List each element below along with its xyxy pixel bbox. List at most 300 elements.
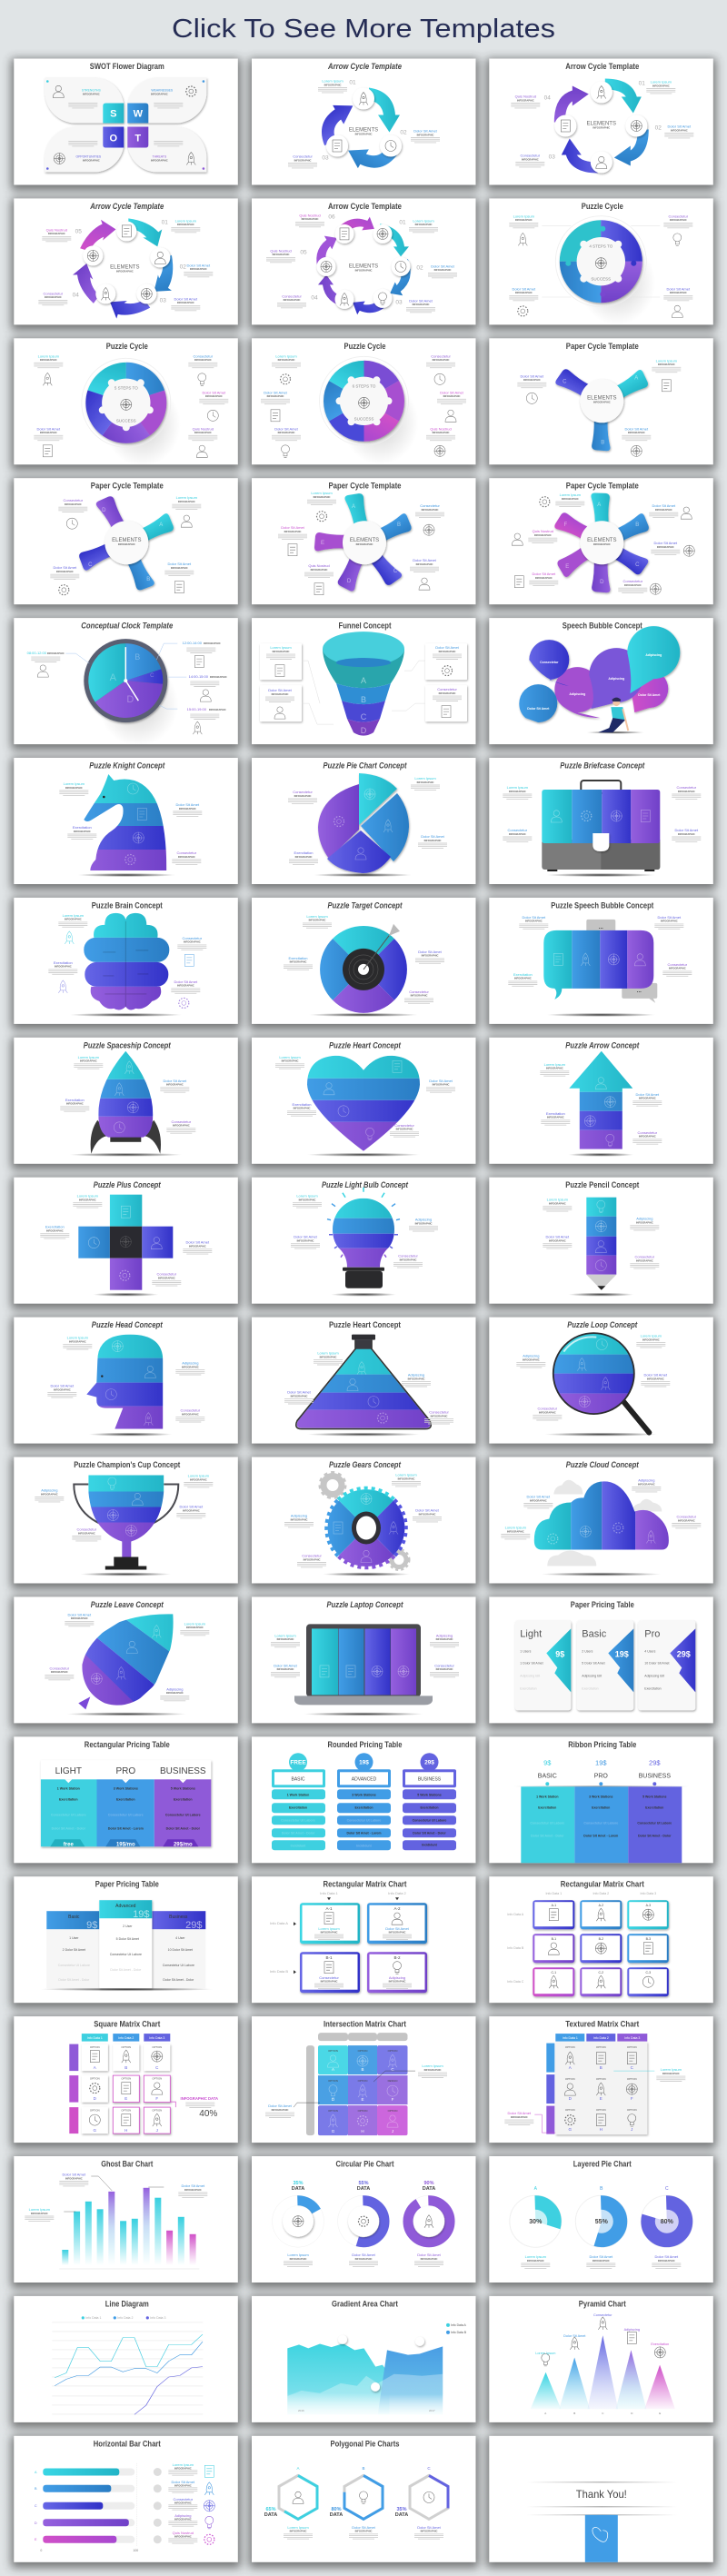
column text: PRO <box>115 1766 135 1776</box>
paper blades <box>77 494 175 592</box>
text blocks: Consectetur <box>64 498 84 502</box>
panel: Rounded Pricing Table <box>252 1736 476 1863</box>
cell content: C <box>391 2067 394 2072</box>
column text: BUSINESS <box>418 1776 442 1782</box>
SWOT text blocks: INFOGRAPHIC <box>151 158 168 162</box>
cell content <box>548 1904 653 1988</box>
text blocks <box>503 785 701 841</box>
panel: Ghost Bar Chart <box>14 2156 238 2283</box>
text blocks: Exercitation <box>73 825 92 830</box>
text blocks: INFOGRAPHIC <box>400 1258 416 1261</box>
heading: Gradient Area Chart <box>332 2299 399 2309</box>
text blocks: INFOGRAPHIC <box>443 394 460 398</box>
heading: Speech Bubble Concept <box>563 622 642 632</box>
text blocks: Dolor Sit Amet <box>268 688 293 692</box>
cell content: C <box>631 2065 634 2070</box>
icons <box>512 497 694 594</box>
text blocks: INFOGRAPHIC <box>186 1626 204 1629</box>
cell content: E <box>361 2097 364 2102</box>
text blocks: Dolor Sit Amet <box>180 1505 204 1508</box>
text blocks: INFOGRAPHIC <box>174 2501 192 2504</box>
cell content: INFOGRAPHIC <box>389 1980 405 1984</box>
cell content: OPTION <box>121 2077 131 2081</box>
price chevrons: 9$ <box>555 1649 564 1658</box>
plan names and rows <box>520 1628 670 1690</box>
heading: Paper Pricing Table <box>571 1600 634 1610</box>
callouts: Dolor Sit Amet <box>508 2111 532 2115</box>
column text: Dolor Sit Amet - Dolor <box>166 1826 201 1830</box>
text blocks: INFOGRAPHIC <box>173 1124 190 1128</box>
cell content: E <box>600 2096 603 2101</box>
heading: Paper Cycle Template <box>91 482 164 492</box>
text blocks <box>60 1055 195 1133</box>
callouts: INFOGRAPHIC <box>511 2115 528 2119</box>
text blocks <box>45 1612 209 1701</box>
column text: Consectetur Ut Labore <box>51 1813 86 1816</box>
column text: Dolor Sit Amet - Dolor <box>110 1968 142 1972</box>
cell content: OPTION <box>388 2109 397 2113</box>
value labels: 90% <box>423 2181 434 2186</box>
heading: Puzzle Knight Concept <box>89 761 165 771</box>
info boxes <box>260 643 467 721</box>
percent labels: 80% <box>661 2219 674 2225</box>
clock <box>84 639 178 746</box>
text blocks: Adipiscing <box>408 1373 424 1378</box>
text blocks: Exercitation <box>45 1225 65 1229</box>
pricing column: basic <box>272 1753 325 1850</box>
text blocks: INFOGRAPHIC <box>189 1244 206 1248</box>
leaf <box>69 1614 184 1716</box>
panel: Pyramid Chart <box>489 2296 713 2422</box>
text blocks: Consectetur <box>669 214 689 218</box>
arrow cycle: ELEMENTS <box>587 122 616 127</box>
text blocks: INFOGRAPHIC <box>657 545 674 549</box>
column text: Exercitation <box>59 1797 78 1801</box>
cell content: A-1 <box>552 1904 556 1907</box>
column text: Dolor Sit Amet - Lorem <box>347 1831 381 1835</box>
text blocks: INFOGRAPHIC <box>535 576 553 580</box>
text blocks: Consectetur <box>668 962 688 967</box>
text blocks: INFOGRAPHIC <box>509 832 526 836</box>
text blocks: INFOGRAPHIC <box>284 298 300 302</box>
text blocks: Consectetur <box>194 353 214 358</box>
heading: Horizontal Bar Chart <box>94 2439 161 2449</box>
panel: Puzzle Head Concept <box>14 1318 238 1444</box>
text blocks: Dolor Sit Amet <box>415 1508 440 1512</box>
text blocks: INFOGRAPHIC <box>174 2534 192 2538</box>
text blocks: Lorem Ipsum <box>317 1351 339 1356</box>
text blocks: 15:00-19:00 <box>187 707 207 711</box>
cell content: INFOGRAPHIC <box>321 1980 337 1984</box>
text blocks: INFOGRAPHIC <box>636 1220 653 1224</box>
cell content: H <box>361 2129 364 2133</box>
cell content: B <box>124 2065 127 2070</box>
panel: Polygonal Pie Charts <box>252 2436 476 2562</box>
panel: Puzzle Gears Concept <box>252 1457 476 1583</box>
text blocks: 01 <box>162 219 168 225</box>
column text: FREE <box>290 1759 306 1765</box>
text blocks: Dolor Sit Amet <box>168 562 192 566</box>
panel: Puzzle Cycle (5) <box>14 338 238 466</box>
column text: 2 Dolor Sit Amet <box>63 1948 85 1952</box>
text blocks <box>275 1055 455 1137</box>
icons <box>542 2317 665 2366</box>
paper blades: E <box>321 541 324 546</box>
text blocks: INFOGRAPHIC <box>355 2257 372 2261</box>
text blocks: INFOGRAPHIC <box>661 920 678 923</box>
column text: Consectetur Ut Labore <box>281 1818 315 1822</box>
text blocks: INFOGRAPHIC <box>182 1365 199 1368</box>
column text: Dolor Sit Amet - Dolor <box>638 1834 672 1837</box>
cell content: OPTION <box>90 2045 100 2049</box>
plan names and rows: 5 Dolor Sit Amet <box>582 1661 605 1665</box>
text labels: Lorem Ipsum <box>535 2352 555 2355</box>
cell content: OPTION <box>596 2108 606 2112</box>
text blocks <box>266 213 457 313</box>
heading: Thank You! <box>576 2488 627 2501</box>
paper blades: B <box>601 440 604 445</box>
flask <box>293 1335 434 1437</box>
text blocks: INFOGRAPHIC <box>273 650 289 653</box>
panel: Arrow Cycle Template (3) <box>252 58 476 185</box>
cell content: A <box>332 2067 334 2072</box>
text blocks: Lorem Ipsum <box>29 2207 51 2212</box>
light bulb <box>327 1188 400 1297</box>
text blocks: INFOGRAPHIC <box>422 508 438 512</box>
puzzle speech bubble: ... <box>599 925 603 930</box>
text blocks: Quis Nostrud <box>270 248 292 253</box>
matrix panel: Info Data 3 <box>624 2036 640 2040</box>
cell content: OPTION <box>121 2109 131 2113</box>
text blocks: Dolor Sit Amet <box>521 373 544 378</box>
text blocks: Dolor Sit Amet <box>652 503 676 508</box>
icons <box>37 656 211 734</box>
text blocks: Dolor Sit Amet <box>352 2253 376 2257</box>
arrow cycle: ELEMENTS <box>349 127 378 133</box>
text blocks: INFOGRAPHIC <box>522 157 539 161</box>
heading: Puzzle Cycle <box>344 342 385 352</box>
text blocks: INFOGRAPHIC <box>210 675 227 679</box>
text blocks: INFOGRAPHIC <box>31 2212 48 2215</box>
text labels <box>535 2313 669 2415</box>
value labels: DATA <box>357 2186 370 2192</box>
text blocks: Exercitation <box>54 960 73 965</box>
funnel: B <box>361 695 366 704</box>
text blocks: INFOGRAPHIC <box>530 1498 547 1502</box>
column text: 5 Work Stations <box>417 1793 442 1796</box>
plan names and rows: 1 Dolor Sit Amet <box>520 1661 543 1665</box>
cell content: C-3 <box>645 1971 651 1974</box>
plan names and rows: Adipiscing Elit <box>644 1674 664 1677</box>
data markers and legend: Info Data B <box>451 2331 467 2334</box>
text blocks: 04 <box>544 94 551 102</box>
callouts <box>265 2064 447 2117</box>
cell content: A-2 <box>393 1906 401 1911</box>
column text: Exercitation <box>592 1805 610 1809</box>
paper blades: C <box>393 569 398 574</box>
bars <box>35 2463 138 2552</box>
heading: Rectangular Matrix Chart <box>561 1880 644 1890</box>
text blocks: Dolor Sit Amet <box>523 915 546 920</box>
heading: Arrow Cycle Template <box>327 62 403 72</box>
text blocks: 05 <box>75 228 82 234</box>
axis labels: Info Data B <box>507 1946 524 1950</box>
text blocks: INFOGRAPHIC <box>178 500 195 503</box>
bars: C <box>35 2504 37 2508</box>
heading: Puzzle Briefcase Concept <box>560 761 645 771</box>
bars: D <box>35 2521 37 2525</box>
column text: Consectetur Ut Labore <box>637 1821 672 1825</box>
text blocks: 06 <box>328 214 335 220</box>
heading: Circular Pie Chart <box>336 2159 394 2170</box>
text blocks: INFOGRAPHIC <box>194 431 212 434</box>
panel: Puzzle Cycle (4) <box>489 198 713 325</box>
heading: Puzzle Cycle <box>582 202 623 212</box>
text blocks: Adipiscing <box>291 1514 307 1517</box>
heart <box>306 1051 421 1157</box>
text blocks: INFOGRAPHIC <box>166 1691 184 1695</box>
bars: E <box>35 2538 37 2541</box>
text blocks <box>38 218 213 311</box>
text blocks: INFOGRAPHIC <box>267 394 284 398</box>
text blocks: INFOGRAPHIC <box>278 431 294 434</box>
heading: Puzzle Spaceship Concept <box>84 1040 171 1050</box>
cell content: OPTION <box>328 2079 338 2083</box>
column text: Dolor Sit Amet - Lorem <box>108 1826 144 1830</box>
heading: Puzzle Pencil Concept <box>565 1180 640 1190</box>
text blocks: Lorem Ipsum <box>287 2253 309 2257</box>
cell content: A-1 <box>325 1906 333 1911</box>
panel: Puzzle Speech Bubble Concept <box>489 898 713 1024</box>
text blocks: INFOGRAPHIC <box>433 358 449 362</box>
text blocks: Consectetur <box>302 1554 322 1557</box>
panel: Line Diagram <box>14 2296 238 2422</box>
heading: Arrow Cycle Template <box>89 202 164 212</box>
labels: C <box>427 2466 431 2471</box>
text blocks: INFOGRAPHIC <box>658 363 675 366</box>
text blocks: INFOGRAPHIC <box>355 2530 372 2533</box>
cell content: OPTION <box>328 2109 338 2113</box>
bubble labels <box>527 653 662 711</box>
text blocks <box>517 358 681 441</box>
text blocks: INFOGRAPHIC <box>174 2517 192 2521</box>
column text: Consectetur Ut Labore <box>108 1813 144 1816</box>
column text: Dolor Sit Amet - Lorem <box>583 1834 618 1837</box>
text labels: Adipiscing <box>624 2328 640 2332</box>
text blocks: INFOGRAPHIC <box>647 1377 664 1380</box>
text blocks: Lorem Ipsum <box>505 1525 527 1530</box>
text blocks: Consectetur <box>157 1272 177 1277</box>
text blocks: Consectetur <box>420 503 440 508</box>
text blocks: INFOGRAPHIC <box>205 394 223 398</box>
text blocks: Lorem Ipsum <box>525 2254 547 2259</box>
column text: 9$ <box>86 1920 97 1931</box>
text blocks: Adipiscing <box>638 1477 654 1483</box>
text blocks: INFOGRAPHIC <box>295 855 312 859</box>
cell interiors <box>534 1902 667 1994</box>
text blocks: INFOGRAPHIC <box>624 583 642 587</box>
panel: Paper Cycle Template (6) <box>489 478 713 604</box>
bubble labels: Adipiscing <box>569 692 585 696</box>
text blocks: Lorem Ipsum <box>311 491 333 495</box>
panel: Puzzle Champion's Cup Concept <box>14 1457 238 1583</box>
text blocks <box>521 2254 681 2268</box>
text blocks: INFOGRAPHIC <box>642 1338 660 1341</box>
text blocks: Lorem Ipsum <box>279 1055 301 1059</box>
text blocks: INFOGRAPHIC <box>294 1107 310 1110</box>
funnel <box>323 632 404 736</box>
column text <box>281 1759 446 1847</box>
text labels: Dolor Sit Amet <box>563 2334 586 2338</box>
cell content: INFOGRAPHIC <box>321 1931 337 1934</box>
text blocks: Dolor Sit Amet <box>172 2480 195 2484</box>
panel: Layered Pie Chart <box>489 2156 713 2283</box>
puzzle ring <box>555 216 655 325</box>
cell content: B-1 <box>325 1955 333 1960</box>
axis labels: Info Data 2 <box>593 1892 609 1895</box>
cell content: INFOGRAPHIC <box>389 1931 405 1934</box>
text blocks: Dolor Sit Amet <box>421 834 445 839</box>
text blocks: Exercitation <box>513 972 533 977</box>
text blocks: INFOGRAPHIC <box>507 1529 524 1533</box>
panel: Arrow Cycle Template (5) <box>14 198 238 327</box>
pie centres <box>523 2210 679 2233</box>
column text: 19$ <box>595 1758 607 1766</box>
column text: 19$/mo <box>116 1842 135 1847</box>
panel: Paper Cycle Template (3) <box>489 338 713 464</box>
labels: A <box>296 2466 300 2471</box>
text blocks: Dolor Sit Amet <box>287 1390 312 1395</box>
heading: Puzzle Brain Concept <box>92 900 163 910</box>
column text: ADVANCED <box>352 1776 377 1782</box>
text blocks <box>501 1477 701 1539</box>
panel: Puzzle Knight Concept <box>14 758 238 884</box>
heading: Puzzle Plus Concept <box>94 1180 161 1190</box>
SWOT letters: O <box>110 133 118 144</box>
panel: Puzzle Plus Concept <box>14 1178 238 1304</box>
icons <box>271 373 456 457</box>
text blocks: Dolor Sit Amet <box>187 263 211 267</box>
SWOT letters <box>110 109 144 144</box>
text blocks: INFOGRAPHIC <box>309 919 325 922</box>
panel: Puzzle Loop Concept <box>489 1318 713 1444</box>
text blocks: Lorem Ipsum <box>656 358 678 363</box>
axis labels: Info Data 3 <box>641 1892 656 1895</box>
cell content: E <box>124 2096 127 2101</box>
text blocks: INFOGRAPHIC <box>284 530 301 533</box>
heading: Polygonal Pie Charts <box>331 2439 400 2449</box>
legend <box>82 2316 165 2320</box>
text blocks: INFOGRAPHIC <box>436 1667 453 1671</box>
text blocks: Consectetur <box>44 291 64 295</box>
text blocks: Dolor Sit Amet <box>417 2253 442 2257</box>
text blocks: Dolor Sit Amet <box>513 286 536 291</box>
text blocks: 03 <box>160 297 166 303</box>
column text: Exercitation <box>174 1797 193 1801</box>
text blocks <box>528 492 680 593</box>
text blocks: Dolor Sit Amet <box>174 980 198 984</box>
text blocks: Dolor Sit Amet <box>625 426 649 431</box>
text blocks: INFOGRAPHIC <box>593 2259 610 2263</box>
column text: Business <box>169 1915 188 1920</box>
cell content: OPTION <box>152 2109 162 2113</box>
heading: Puzzle Pie Chart Concept <box>324 761 407 771</box>
text blocks: INFOGRAPHIC <box>523 378 541 382</box>
text blocks: INFOGRAPHIC <box>636 1258 653 1262</box>
text blocks: INFOGRAPHIC <box>65 918 82 921</box>
text blocks: Consectetur <box>437 687 457 691</box>
percent labels: C <box>665 2186 669 2192</box>
arrow cycle <box>309 87 402 182</box>
text blocks: Lorem Ipsum <box>78 1055 100 1059</box>
text blocks: INFOGRAPHIC <box>282 1059 298 1063</box>
icons <box>59 515 192 595</box>
text blocks: INFOGRAPHIC <box>546 1067 563 1070</box>
paper blades: B <box>635 522 639 528</box>
panel: Puzzle Briefcase Concept <box>489 758 713 884</box>
ribbon <box>585 2515 618 2562</box>
text blocks: Lorem Ipsum <box>287 2525 309 2530</box>
text blocks: Consectetur <box>177 850 197 855</box>
text blocks: INFOGRAPHIC <box>179 807 196 811</box>
heading: Puzzle Loop Concept <box>567 1320 638 1330</box>
puzzle ring <box>312 351 418 464</box>
text blocks: Exercitation <box>546 1111 565 1116</box>
SWOT text blocks: OPPORTUNITIES <box>75 154 102 158</box>
text blocks <box>509 214 692 301</box>
text blocks: Consectetur <box>638 1130 658 1135</box>
heading: Rectangular Matrix Chart <box>324 1880 407 1890</box>
paper blades <box>314 492 413 592</box>
column text: Exercitation <box>420 1805 439 1809</box>
column text: Dolor Sit Amet - Dolor <box>52 1826 86 1830</box>
heading: Puzzle Heart Concept <box>329 1320 402 1330</box>
value labels: DATA <box>423 2186 435 2192</box>
column text: 19$ <box>133 1909 149 1920</box>
column text: 1 Work Station <box>536 1795 559 1798</box>
cell content: J <box>156 2128 158 2133</box>
value labels <box>292 2181 435 2192</box>
text blocks <box>508 915 692 986</box>
text blocks <box>284 914 444 1003</box>
text blocks: Consectetur <box>183 936 203 940</box>
plan names and rows: Adipiscing Elit <box>582 1674 602 1677</box>
column text: Incididunt <box>291 1844 306 1847</box>
text blocks: Dolor Sit Amet <box>164 1079 187 1083</box>
text blocks: INFOGRAPHIC <box>398 1477 414 1480</box>
text blocks: Lorem Ipsum <box>395 1472 417 1477</box>
paper blades: A <box>159 522 163 528</box>
text blocks: INFOGRAPHIC <box>65 786 83 790</box>
plan names and rows: 2 Users <box>582 1649 593 1653</box>
panel: Puzzle Cycle (6) <box>252 338 476 464</box>
labels: 80% <box>331 2507 342 2512</box>
gray clouds <box>547 1480 662 1566</box>
text blocks: INFOGRAPHIC <box>47 651 65 655</box>
SWOT icons and dots <box>46 80 204 170</box>
heading: Arrow Cycle Template <box>565 62 639 72</box>
text blocks: INFOGRAPHIC <box>194 358 212 362</box>
column text: Consectetur Ut Labore <box>347 1818 381 1822</box>
legend: Info Data 1 <box>85 2316 101 2320</box>
funnel: A <box>361 676 366 685</box>
column text: Exercitation <box>538 1805 556 1809</box>
cell content: B <box>600 2065 603 2070</box>
text blocks: Dolor Sit Amet <box>186 1240 210 1245</box>
heading: Line Diagram <box>105 2299 149 2309</box>
text blocks: INFOGRAPHIC <box>515 218 533 222</box>
cell content <box>314 1906 412 1989</box>
